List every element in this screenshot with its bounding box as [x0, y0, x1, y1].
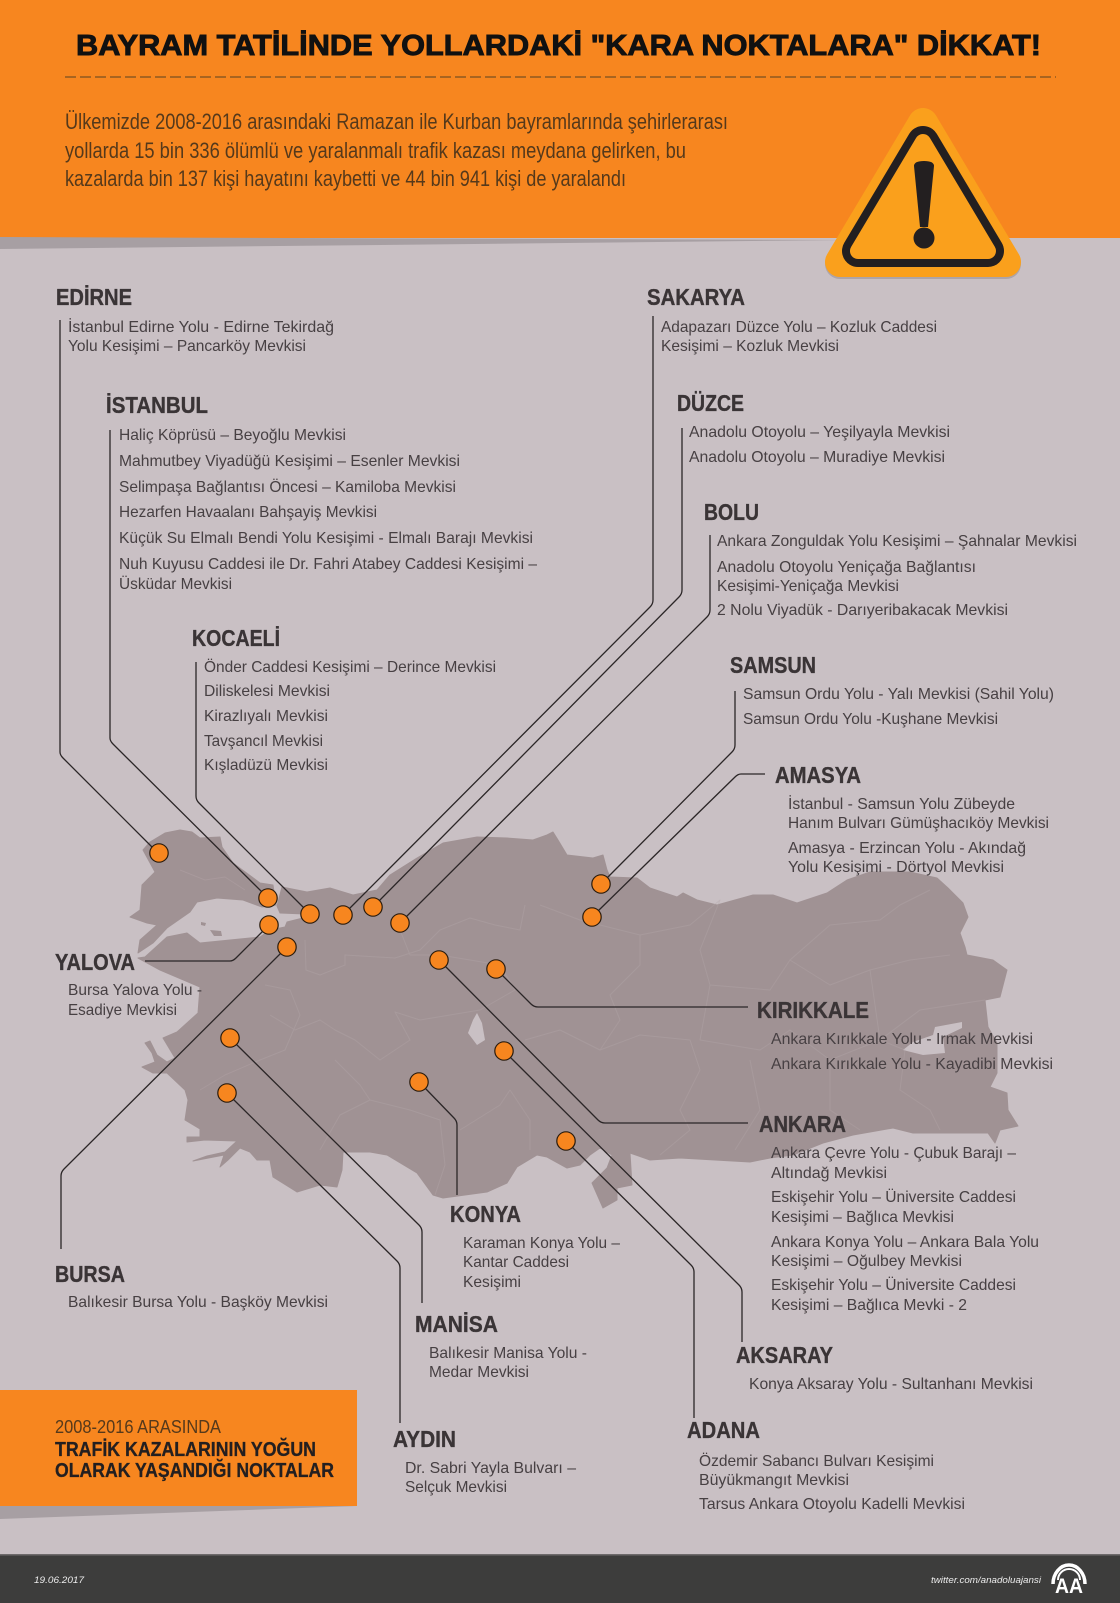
panel: Ankara: Kesişimi – Oğulbey Mevkisi	[771, 1253, 962, 1270]
panel: Kocaeli: Tavşancıl Mevkisi	[204, 733, 323, 750]
panel: Samsun: Samsun Ordu Yolu - Yalı Mevkisi (Sahil Yolu)	[743, 686, 1054, 703]
panel: Sakarya	[647, 284, 937, 355]
panel: Ankara: Kesişimi – Bağlıca Mevkisi	[771, 1209, 954, 1226]
panel: Manisa	[415, 1311, 587, 1381]
panel: İstanbul: Küçük Su Elmalı Bendi Yolu Kesişimi - Elmalı Barajı Mevkisi	[119, 530, 533, 547]
title: BAYRAM TATİLİNDE YOLLARDAKİ "KARA NOKTALARA" DİKKAT!	[76, 30, 1041, 62]
panel: Aksaray: AKSARAY	[736, 1342, 833, 1368]
panel: Amasya	[775, 762, 1049, 876]
panel: Sakarya: SAKARYA	[647, 284, 745, 310]
map of Turkey	[130, 830, 1018, 1208]
panel: Adana: Özdemir Sabancı Bulvarı Kesişimi	[699, 1452, 934, 1470]
panel: Manisa: MANİSA	[415, 1311, 498, 1337]
panel: Adana: Büyükmangıt Mevkisi	[699, 1472, 849, 1489]
panel: İstanbul: Üsküdar Mevkisi	[119, 575, 232, 593]
lakes and islands	[201, 922, 962, 1055]
panel: Bolu: Anadolu Otoyolu Yeniçağa Bağlantısı	[717, 559, 976, 576]
panel: Edirne: EDİRNE	[56, 284, 132, 310]
intro text: Ülkemizde 2008-2016 arasındaki Ramazan ile Kurban bayramlarında şehirlerarası	[65, 109, 728, 134]
panel: Kocaeli	[192, 625, 496, 774]
callout: legend box: 2008-2016 ARASINDA	[55, 1417, 221, 1437]
intro text: yollarda 15 bin 336 ölümlü ve yaralanmalı trafik kazası meydana gelirken, bu	[65, 138, 686, 163]
icon: agency logo: AA	[1055, 1575, 1083, 1598]
panel: Yalova	[55, 949, 202, 1019]
panel: Konya: Kesişimi	[463, 1274, 521, 1291]
panel: Manisa: Balıkesir Manisa Yolu -	[429, 1345, 587, 1362]
date: 19.06.2017	[34, 1575, 85, 1586]
panel: Bursa	[55, 1261, 328, 1311]
panel: Amasya: AMASYA	[775, 762, 861, 788]
panel: Bursa: BURSA	[55, 1261, 125, 1287]
panel: Bolu: Ankara Zonguldak Yolu Kesişimi – Şahnalar Mevkisi	[717, 533, 1077, 550]
panel: Kocaeli: KOCAELİ	[192, 625, 280, 651]
panel: Yalova: Bursa Yalova Yolu -	[68, 982, 202, 999]
panel: Konya: Karaman Konya Yolu –	[463, 1235, 620, 1252]
panel: İstanbul: Nuh Kuyusu Caddesi ile Dr. Fahri Atabey Caddesi Kesişimi –	[119, 556, 537, 573]
panel: Aydın: Dr. Sabri Yayla Bulvarı –	[405, 1460, 576, 1477]
panel: Düzce: Anadolu Otoyolu – Yeşilyayla Mevkisi	[689, 424, 950, 441]
panel: Aksaray	[736, 1342, 1033, 1393]
panel: Konya: KONYA	[450, 1201, 521, 1227]
panel: Bursa: Balıkesir Bursa Yolu - Başköy Mevkisi	[68, 1294, 328, 1311]
panel: Aksaray: Konya Aksaray Yolu - Sultanhanı Mevkisi	[749, 1376, 1033, 1393]
panel: Yalova: Esadiye Mevkisi	[68, 1002, 177, 1019]
panel: Aydın	[393, 1426, 576, 1496]
icon: warning sign	[840, 123, 1006, 264]
panel: İstanbul: İSTANBUL	[106, 392, 208, 418]
panel: Konya: Kantar Caddesi	[463, 1254, 569, 1271]
panel: Amasya: Amasya - Erzincan Yolu - Akındağ	[788, 840, 1026, 857]
footer bar	[0, 1554, 1120, 1603]
panel: Bolu: 2 Nolu Viyadük - Darıyeribakacak Mevkisi	[717, 602, 1008, 619]
panel: İstanbul: Hezarfen Havaalanı Bahşayiş Mevkisi	[119, 504, 377, 521]
panel: Sakarya: Adapazarı Düzce Yolu – Kozluk Caddesi	[661, 319, 937, 336]
panel: Kocaeli: Önder Caddesi Kesişimi – Derince Mevkisi	[204, 658, 496, 676]
province borders	[180, 870, 985, 1195]
panel: Amasya: İstanbul - Samsun Yolu Zübeyde	[788, 794, 1015, 813]
panel: Kocaeli: Diliskelesi Mevkisi	[204, 683, 330, 700]
panel: Ankara: ANKARA	[759, 1111, 846, 1137]
callout: legend box: OLARAK YAŞANDIĞI NOKTALAR	[55, 1458, 334, 1482]
panel: Aydın: Selçuk Mevkisi	[405, 1479, 507, 1496]
intro text: kazalarda bin 137 kişi hayatını kaybetti ve 44 bin 941 kişi de yaralandı	[65, 166, 626, 191]
panel: Ankara: Ankara Çevre Yolu - Çubuk Barajı –	[771, 1145, 1016, 1162]
callout: legend box	[0, 1390, 357, 1519]
panel: Samsun	[730, 652, 1054, 728]
panel: Konya	[450, 1201, 620, 1291]
intro text	[65, 109, 728, 191]
panel: Kocaeli: Kirazlıyalı Mevkisi	[204, 708, 328, 725]
panel: Amasya: Hanım Bulvarı Gümüşhacıköy Mevkisi	[788, 815, 1049, 832]
panel: Aydın: AYDIN	[393, 1426, 456, 1452]
panel: Adana: Tarsus Ankara Otoyolu Kadelli Mevkisi	[699, 1496, 965, 1513]
panel: İstanbul: Haliç Köprüsü – Beyoğlu Mevkisi	[119, 427, 346, 444]
callout: legend box: TRAFİK KAZALARININ YOĞUN	[55, 1437, 316, 1461]
panel: Adana	[687, 1417, 965, 1513]
panel: Ankara	[759, 1111, 1039, 1314]
panel: Edirne: Yolu Kesişimi – Pancarköy Mevkisi	[68, 338, 306, 355]
panel: Adana: ADANA	[687, 1417, 760, 1443]
panel: Kırıkkale: KIRIKKALE	[757, 997, 869, 1023]
panel: Samsun: Samsun Ordu Yolu -Kuşhane Mevkisi	[743, 711, 998, 728]
panel: Manisa: Medar Mevkisi	[429, 1364, 529, 1381]
header band	[0, 0, 1120, 249]
panel: Kocaeli: Kışladüzü Mevkisi	[204, 757, 328, 774]
panel: Düzce	[677, 390, 950, 466]
location dots	[150, 844, 610, 1150]
panel: Bolu: BOLU	[704, 499, 759, 525]
panel: Amasya: Yolu Kesişimi - Dörtyol Mevkisi	[788, 859, 1004, 876]
panel: Bolu: Kesişimi-Yeniçağa Mevkisi	[717, 578, 899, 595]
panel: Samsun: SAMSUN	[730, 652, 816, 678]
panel: İstanbul: Selimpaşa Bağlantısı Öncesi – Kamiloba Mevkisi	[119, 478, 456, 496]
leader lines	[60, 316, 765, 1423]
panel: Edirne: İstanbul Edirne Yolu - Edirne Tekirdağ	[68, 317, 334, 336]
panel: Ankara: Eskişehir Yolu – Üniversite Caddesi	[771, 1188, 1016, 1206]
panel: Ankara: Ankara Konya Yolu – Ankara Bala Yolu	[771, 1234, 1039, 1251]
social handle: twitter.com/anadoluajansi	[931, 1575, 1042, 1586]
icon: agency logo	[1053, 1565, 1085, 1598]
panel: Kırıkkale: Ankara Kırıkkale Yolu - Irmak Mevkisi	[771, 1031, 1033, 1048]
panel: Ankara: Kesişimi – Bağlıca Mevki - 2	[771, 1297, 967, 1314]
panel: Yalova: YALOVA	[55, 949, 135, 975]
panel: İstanbul	[106, 392, 537, 593]
panel: Sakarya: Kesişimi – Kozluk Mevkisi	[661, 338, 839, 355]
panel: Düzce: Anadolu Otoyolu – Muradiye Mevkisi	[689, 449, 945, 466]
panel: İstanbul: Mahmutbey Viyadüğü Kesişimi – Esenler Mevkisi	[119, 453, 460, 470]
panel: Kırıkkale: Ankara Kırıkkale Yolu - Kayadibi Mevkisi	[771, 1056, 1053, 1073]
panel: Ankara: Eskişehir Yolu – Üniversite Caddesi	[771, 1276, 1016, 1294]
panel: Düzce: DÜZCE	[677, 390, 744, 416]
panel: Edirne	[56, 284, 334, 355]
panel: Ankara: Altındağ Mevkisi	[771, 1165, 887, 1182]
panel: Bolu	[704, 499, 1077, 619]
panel: Kırıkkale	[757, 997, 1053, 1073]
